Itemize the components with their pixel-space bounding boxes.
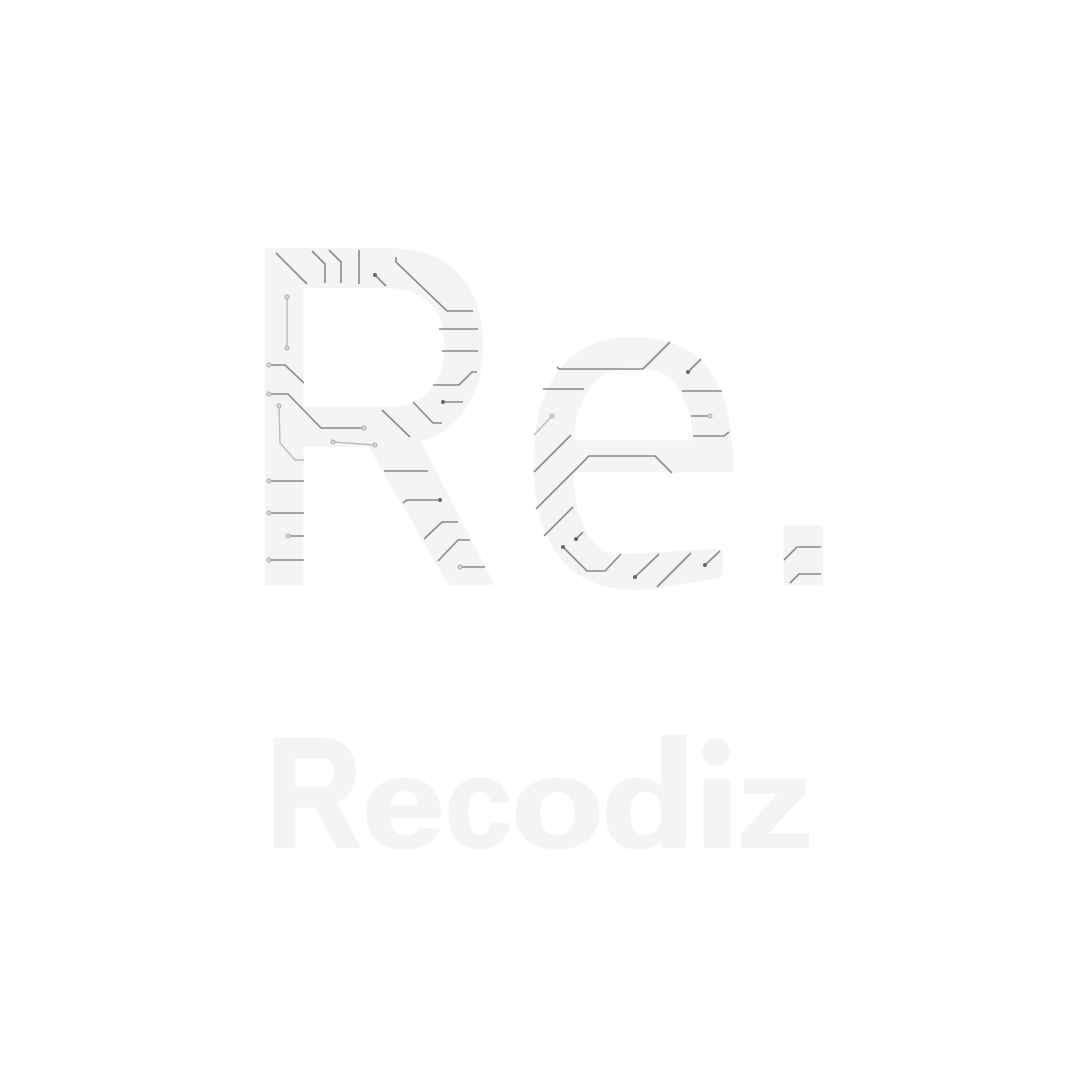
wordmark: Recodiz: d [601,733,694,874]
wordmark: Recodiz: R [266,706,362,880]
wordmark: Recodiz: z [736,733,813,874]
wordmark: Recodiz: e [362,733,445,874]
letter R: R [235,146,510,686]
wordmark: Recodiz: c [445,733,512,875]
logo mark: Re. with circuit traces [235,128,854,690]
period: . [752,128,854,690]
wordmark: Recodiz [266,706,813,880]
letter e: e [516,169,751,683]
wordmark: Recodiz: o [511,733,604,874]
wordmark: Recodiz: i [693,733,741,874]
